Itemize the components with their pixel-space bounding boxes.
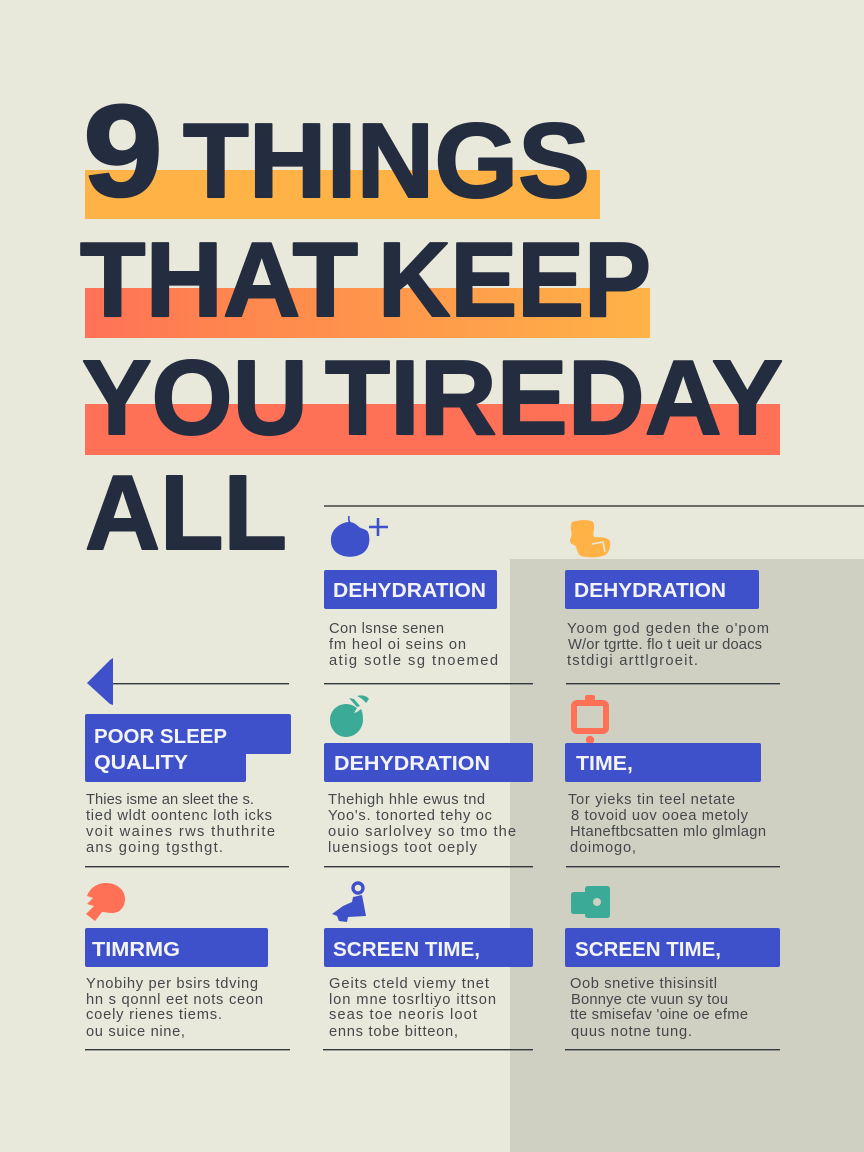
description: hn s qonnl eet nots ceon — [86, 992, 263, 1008]
background gray panel — [510, 559, 864, 1152]
label — [324, 570, 497, 609]
card: time — [565, 695, 780, 867]
description: ans going tgsthgt. — [86, 840, 223, 856]
highlight stripe: line 2 — [85, 288, 650, 338]
label: SCREEN TIME, — [333, 938, 480, 961]
label: TIMRMG — [92, 938, 180, 961]
description: tstdigi arttlgroeit. — [567, 653, 698, 669]
description: Htaneftbcsatten mlo glmlagn — [570, 824, 766, 840]
label: QUALITY — [94, 751, 188, 774]
description: atig sotle sg tnoemed — [329, 653, 498, 669]
card: poor sleep quality — [85, 658, 291, 867]
icon: green video camera — [571, 886, 610, 918]
description: doimogo, — [570, 840, 636, 856]
label: DEHYDRATION — [574, 579, 726, 602]
description: lon mne tosrltiyo ittson — [329, 992, 496, 1008]
highlight stripe: line 3 — [85, 404, 780, 455]
card: dehydration 1 — [324, 516, 533, 684]
icon: coral head — [86, 883, 125, 921]
description: quus notne tung. — [571, 1024, 692, 1040]
title word YOU: YOU — [82, 339, 308, 457]
card: screen time 1 — [323, 883, 533, 1050]
card: screen time 2 — [565, 886, 780, 1050]
label — [565, 570, 759, 609]
label — [565, 928, 780, 967]
description — [567, 621, 769, 669]
description: 8 tovoid uov ooea metoly — [571, 808, 749, 824]
label: DEHYDRATION — [334, 752, 490, 775]
icon: orange stomach — [570, 520, 610, 557]
description: Thehigh hhle ewus tnd — [328, 792, 485, 808]
label: DEHYDRATION — [333, 579, 486, 602]
title word KEEP: KEEP — [378, 221, 651, 339]
arrow icon — [87, 658, 289, 705]
description: voit waines rws thuthrite — [86, 824, 275, 840]
description — [568, 792, 766, 856]
title — [80, 77, 783, 572]
description — [328, 792, 516, 856]
label — [85, 714, 291, 782]
icon: green fruit — [330, 695, 369, 737]
card: dehydration 3 — [324, 695, 533, 867]
description: Thies isme an sleet the s. — [86, 792, 254, 808]
label — [565, 743, 761, 782]
description: coely rienes tiems. — [86, 1007, 222, 1023]
description: ou suice nine, — [86, 1024, 185, 1040]
description: tied wldt oontenc loth icks — [86, 808, 272, 824]
label: SCREEN TIME, — [575, 938, 721, 961]
description: Bonnye cte vuun sy tou — [571, 992, 728, 1008]
icon: coral timer — [574, 695, 606, 744]
description: Ynobihy per bsirs tdving — [86, 976, 258, 992]
label: TIME, — [576, 752, 633, 775]
description: Con lsnse senen — [329, 621, 444, 637]
title word THAT: THAT — [80, 221, 358, 339]
description: fm heol oi seins on — [329, 637, 466, 653]
description: tte smisefav 'oine oe efme — [570, 1007, 748, 1023]
icon: blue camera on mount — [332, 883, 366, 922]
highlight stripe: line 1 — [85, 170, 600, 219]
description: luensiogs toot oeply — [328, 840, 478, 856]
description: W/or tgrtte. flo t ueit ur doacs — [568, 637, 762, 653]
description: enns tobe bitteon, — [329, 1024, 458, 1040]
description: seas toe neoris loot — [329, 1007, 477, 1023]
description: Geits cteld viemy tnet — [329, 976, 489, 992]
description: ouio sarlolvey so tmo the — [328, 824, 516, 840]
description — [329, 976, 496, 1040]
description: Yoo's. tonorted tehy oc — [328, 808, 492, 824]
description: Yoom god geden the o'pom — [567, 621, 769, 637]
description: Oob snetive thisinsitl — [570, 976, 717, 992]
label — [85, 928, 268, 967]
description — [86, 976, 263, 1040]
card: dehydration 2 — [565, 520, 780, 684]
description — [570, 976, 748, 1040]
card: timing — [85, 883, 290, 1050]
icon: blue apple with plus — [331, 516, 388, 557]
title word ALL: ALL — [85, 454, 287, 572]
description — [86, 792, 275, 856]
title number 9: 9 — [83, 77, 163, 224]
description: Tor yieks tin teel netate — [568, 792, 735, 808]
label: POOR SLEEP — [94, 725, 227, 748]
title word THINGS: THINGS — [183, 102, 590, 220]
label — [324, 743, 533, 782]
label — [324, 928, 533, 967]
top rule — [324, 505, 864, 507]
title word TIREDAY: TIREDAY — [325, 339, 783, 457]
description — [329, 621, 498, 669]
